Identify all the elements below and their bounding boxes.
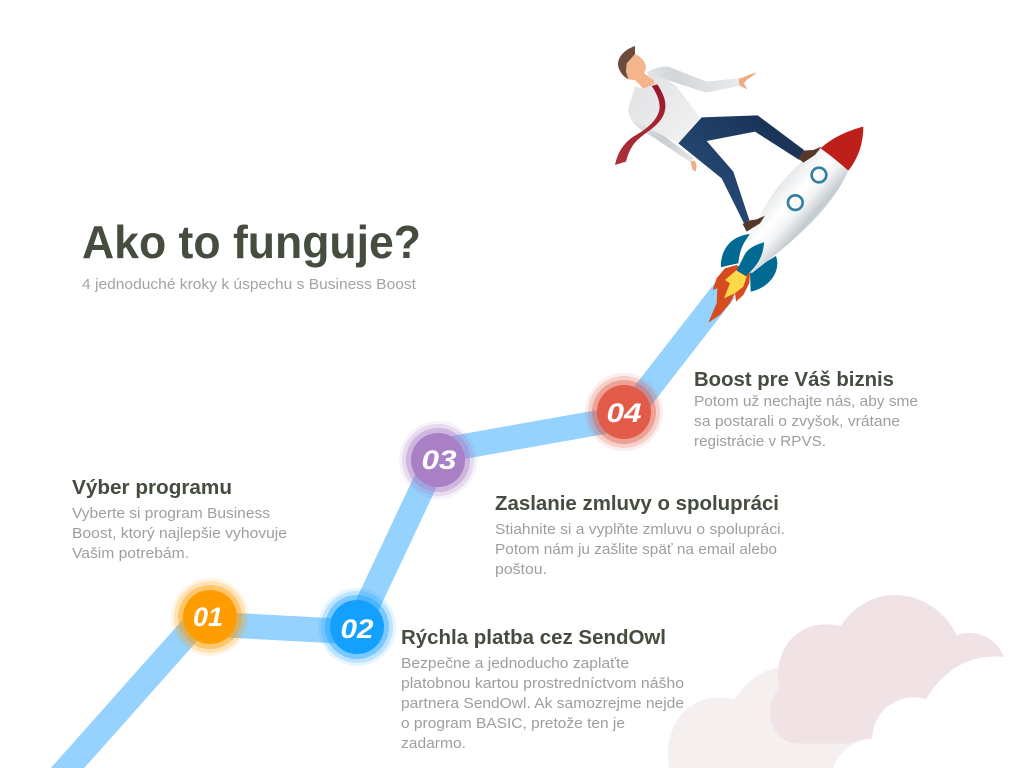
step 01 marker: 01 <box>193 602 223 632</box>
text block: step 4: sa postarali o zvyšok, vrátane <box>694 414 900 430</box>
cloud: background <box>668 595 1004 768</box>
step 03 marker <box>399 421 477 499</box>
text block: step 2 <box>401 627 684 752</box>
subtitle: 4 jednoduché kroky k úspechu s Business Boost <box>82 277 416 293</box>
text block: step 3 <box>495 493 785 578</box>
icon: rocket fins <box>721 234 777 292</box>
title: Ako to funguje? <box>82 216 421 268</box>
step 02 marker <box>318 588 396 666</box>
text block: step 3: poštou. <box>495 562 547 578</box>
text block: step 2: platobnou kartou prostredníctvom nášho <box>401 676 684 692</box>
step 02 marker: 02 <box>340 614 374 644</box>
text block: step 2: Rýchla platba cez SendOwl <box>401 627 666 649</box>
text block: step 2: partnera SendOwl. Ak samozrejme nejde <box>401 696 684 712</box>
text block: step 1: Boost, ktorý najlepšie vyhovuje <box>72 526 287 542</box>
icon: flame <box>708 265 750 323</box>
text block: step 2: o program BASIC, pretože ten je <box>401 716 625 732</box>
step 04 marker: 04 <box>606 398 642 428</box>
text block: step 4 <box>694 369 918 450</box>
text block: step 4: Boost pre Váš biznis <box>694 369 894 391</box>
step 03 marker: 03 <box>422 445 456 475</box>
text block: step 3: Zaslanie zmluvy o spolupráci <box>495 493 779 515</box>
path: step line <box>56 290 725 768</box>
text block: step 2: Bezpečne a jednoducho zaplaťte <box>401 656 629 672</box>
text block: step 3: Stiahnite si a vyplňte zmluvu o spolupráci. <box>495 522 785 538</box>
text block: step 3: Potom nám ju zašlite späť na email alebo <box>495 542 777 558</box>
text block: step 4: registrácie v RPVS. <box>694 434 826 450</box>
illustration: man on rocket <box>615 46 863 323</box>
text block: step 4: Potom už nechajte nás, aby sme <box>694 394 918 410</box>
text block: step 2: zadarmo. <box>401 736 466 752</box>
text block: step 1: Vyberte si program Business <box>72 506 270 522</box>
text block: step 1 <box>72 477 287 562</box>
step 01 marker <box>171 578 249 656</box>
icon: man <box>615 46 822 232</box>
step 04 marker <box>585 373 663 451</box>
text block: step 1: Výber programu <box>72 477 232 499</box>
icon: rocket body <box>737 127 863 276</box>
text block: step 1: Vašim potrebám. <box>72 546 189 562</box>
